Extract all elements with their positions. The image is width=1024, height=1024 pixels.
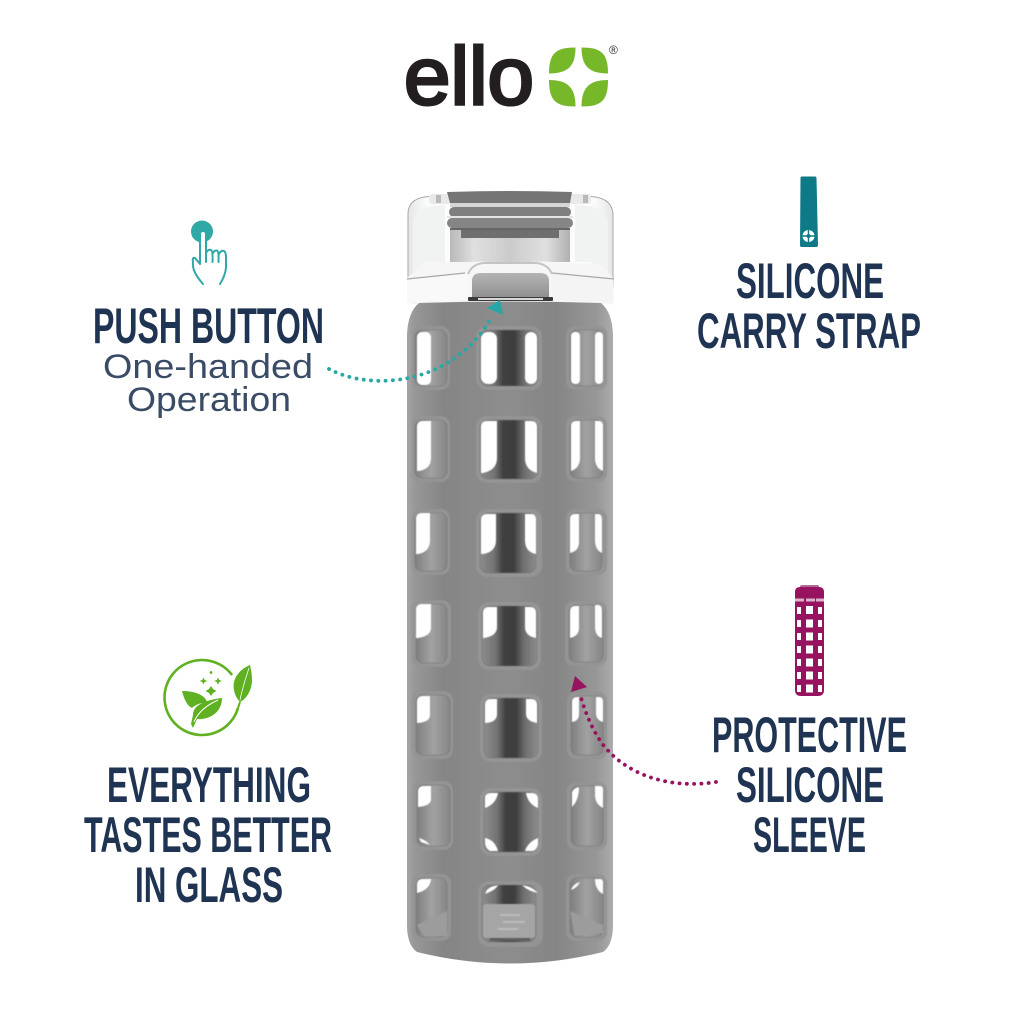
text: one-handed operation: One-handed	[103, 348, 313, 386]
white collar	[407, 262, 614, 304]
heading: silicone carry strap: SILICONE	[736, 253, 884, 309]
text: one-handed operation: Operation	[127, 381, 291, 419]
logo mark: four green leaves	[549, 48, 608, 106]
sleeve windows: row 4	[412, 600, 607, 670]
sleeve windows: row 6	[413, 781, 607, 856]
icon: finger pushing button	[191, 220, 226, 284]
sleeve windows: row 5	[412, 691, 607, 762]
sleeve windows: row 2	[412, 416, 607, 483]
callout: tastes better in glass	[84, 660, 332, 913]
sleeve windows: row 1	[412, 326, 607, 390]
bottle lid	[407, 191, 614, 304]
text: one-handed operation	[103, 348, 313, 419]
heading: silicone carry strap	[697, 253, 921, 359]
logo wordmark: ello	[404, 31, 534, 122]
heading: protective silicone sleeve: SLEEVE	[753, 807, 866, 863]
registered mark: ®	[609, 43, 618, 57]
teal arrowhead	[487, 300, 503, 315]
icon: leaves in circle	[165, 660, 252, 735]
icon: mini sleeved bottle	[795, 585, 824, 696]
callout: silicone carry strap	[697, 176, 921, 359]
logo: ello	[404, 31, 618, 122]
heading: protective silicone sleeve: SILICONE	[736, 757, 884, 813]
arrow: protective sleeve	[571, 676, 716, 784]
icon: carry strap	[800, 176, 818, 247]
sleeve windows: row 7	[412, 874, 607, 947]
heading: everything tastes better in glass: IN GLASS	[135, 857, 283, 913]
callout: push button	[93, 220, 324, 419]
arrow: push button	[329, 300, 503, 381]
crimson arrowhead	[571, 676, 587, 692]
push button	[472, 273, 549, 298]
heading: protective silicone sleeve: PROTECTIVE	[712, 707, 907, 763]
heading: push button: PUSH BUTTON	[93, 298, 324, 354]
heading: everything tastes better in glass: EVERYTHING	[107, 757, 311, 813]
sleeve windows: row 3	[412, 509, 607, 577]
silicone sleeve	[407, 302, 613, 964]
bottle	[407, 191, 614, 964]
heading: protective silicone sleeve	[712, 707, 907, 863]
callout: protective silicone sleeve	[712, 585, 907, 863]
heading: everything tastes better in glass	[84, 757, 332, 913]
heading: everything tastes better in glass: TASTES BETTER	[84, 807, 332, 863]
